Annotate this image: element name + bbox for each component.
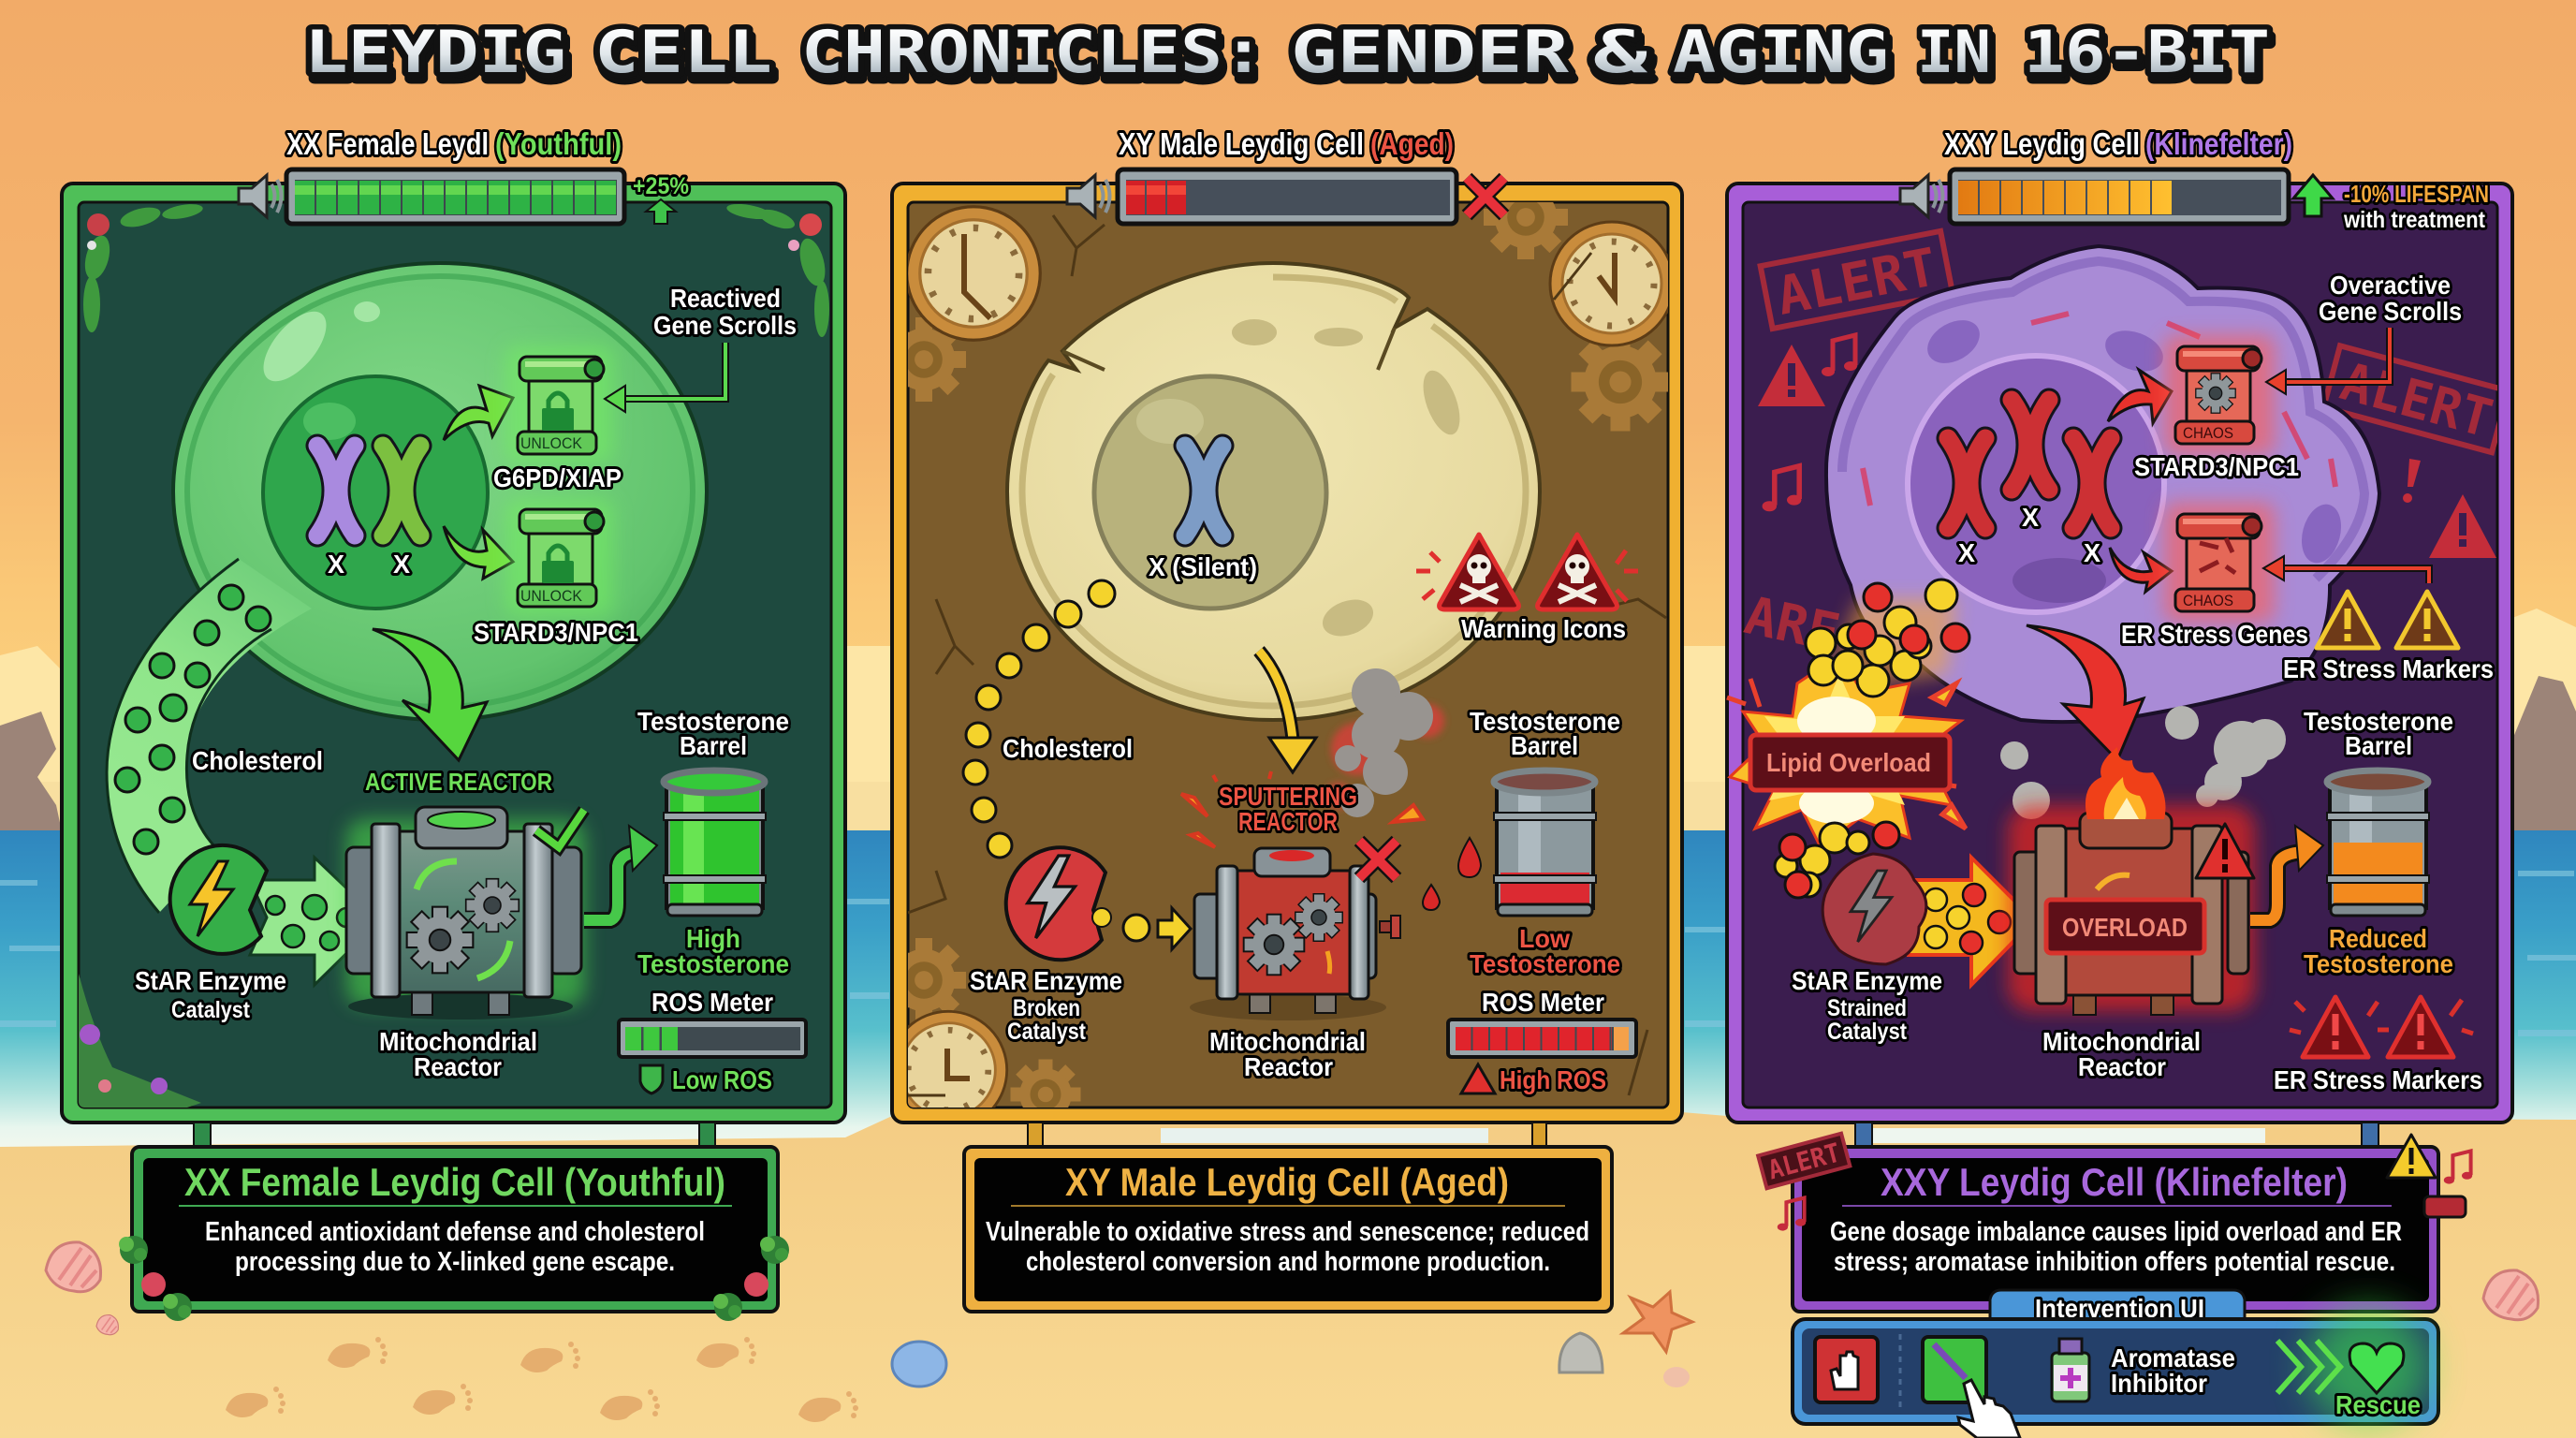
arrow: nucleus to chaos scroll bottom [2110, 548, 2172, 592]
label: aromatase inhibitor: Aromatase [2111, 1343, 2235, 1372]
blobby cell body [1826, 246, 2379, 722]
arrow: weak flow to reactor [1158, 908, 1191, 949]
caption: XX female [119, 1147, 789, 1321]
stat: lifespan with treatment: with treatment [2343, 207, 2486, 233]
icon: rescue heart [2349, 1343, 2404, 1393]
alert stamps and warnings: ALERT [2334, 351, 2498, 450]
caption: XXY Klinefelter: stress; aromatase inhibition offers potential rescue. [1834, 1247, 2395, 1277]
label: ROS meter: ROS Meter [651, 988, 773, 1017]
big red arrow into reactor [2027, 625, 2144, 760]
label: StAR enzyme: StAR Enzyme [135, 966, 286, 995]
panel: XX female youthful [62, 126, 845, 1123]
mitochondrial reactor: overloaded [2008, 747, 2255, 1015]
high ROS status: High ROS [1500, 1065, 1606, 1094]
label: panel header [1944, 126, 2292, 161]
title: LEYDIG [304, 18, 566, 86]
label: warning icons: Warning Icons [1461, 614, 1626, 643]
cholesterol droplets: sparse trail [963, 580, 1149, 941]
testosterone barrel: full [664, 770, 766, 916]
label: low testosterone [1470, 924, 1620, 978]
arrow: label to scroll [605, 343, 725, 412]
support posts: panel 3 [1855, 1123, 2378, 1149]
label: sputtering reactor: REACTOR [1238, 807, 1338, 836]
clocks, gears and cracks [882, 175, 1674, 1129]
caption: XY male: cholesterol conversion and hormone production. [1026, 1247, 1550, 1277]
button: stop hand [1815, 1337, 1878, 1402]
label: panel header: XXY Leydig Cell [1944, 126, 2140, 161]
vine decorations [79, 201, 829, 1108]
label: panel header: (Youthful) [495, 126, 622, 161]
mitochondrial reactor: damaged [1190, 841, 1400, 1020]
icons: red ER stress markers [2290, 997, 2473, 1057]
label: active reactor: ACTIVE REACTOR [365, 768, 552, 796]
caption: XY male [964, 1147, 1612, 1312]
title: GENDER [1291, 18, 1570, 86]
label: testosterone barrel: Testosterone [637, 707, 789, 736]
health bar: low red [1118, 169, 1456, 224]
label: STARD3/NPC1: STARD3/NPC1 [2134, 452, 2299, 481]
caption: XX female: XX Female Leydig Cell (Youthful) [184, 1160, 725, 1204]
label: aromatase inhibitor [2111, 1343, 2235, 1398]
label: mitochondrial reactor [1209, 1027, 1366, 1081]
stat: lifespan with treatment: -10% LIFESPAN [2344, 180, 2489, 208]
chromosome labels: X [1958, 538, 1975, 567]
arrow: cell to reactor, thin [1259, 651, 1316, 772]
label: mitochondrial reactor: Reactor [2078, 1052, 2166, 1081]
caption decorations: alert stamp and warning: ALERT [1764, 1137, 1843, 1185]
label: overactive gene scrolls [2319, 271, 2462, 326]
label: mitochondrial reactor [379, 1027, 537, 1081]
beach shells and starfish [46, 1242, 2539, 1387]
label: STARD3/NPC1: STARD3/NPC1 [474, 618, 638, 647]
icon: speaker [1900, 175, 1943, 217]
label: ER stress markers upper: ER Stress Markers [2283, 654, 2494, 683]
caption: XXY Klinefelter: Gene dosage imbalance causes lipid overload and ER [1830, 1217, 2402, 1247]
frame: gold panel [892, 183, 1682, 1123]
caption: XXY Klinefelter [1793, 1147, 2438, 1312]
title: LEYDIG [307, 24, 569, 93]
stat: lifespan with treatment [2343, 180, 2489, 233]
label: reactived gene scrolls: Gene Scrolls [653, 311, 797, 340]
title: 16-BIT [2027, 24, 2273, 93]
label: testosterone barrel: Barrel [680, 731, 747, 760]
frame: purple panel [1727, 183, 2512, 1123]
high ROS status [1461, 1064, 1606, 1094]
label: StAR enzyme broken: StAR Enzyme [970, 966, 1122, 995]
label: overload sign: OVERLOAD [2062, 913, 2188, 942]
panel: XXY Klinefelter [1727, 126, 2512, 1123]
label: testosterone barrel [637, 707, 789, 760]
testosterone drops [1423, 838, 1481, 910]
icon: speaker [1067, 175, 1110, 217]
label: StAR enzyme strained: StAR Enzyme [1792, 966, 1942, 995]
label: reduced testosterone: Testosterone [2304, 949, 2453, 978]
icon: strained StAR enzyme [1822, 854, 1926, 964]
title: CHRONICLES: [804, 24, 1267, 93]
tab: intervention UI: Intervention UI [2035, 1294, 2204, 1323]
label: mitochondrial reactor [2042, 1027, 2201, 1081]
warning icons [1416, 535, 1638, 609]
support posts: panel 1 [194, 1123, 715, 1149]
label: low testosterone: Testosterone [1470, 949, 1620, 978]
testosterone barrel: reduced [2327, 770, 2429, 916]
title: CHRONICLES: [801, 18, 1265, 86]
label: mitochondrial reactor: Mitochondrial [1209, 1027, 1366, 1056]
cracked cell body [1007, 263, 1540, 720]
icon: green up arrow [2293, 175, 2333, 216]
label: reactived gene scrolls: Reactived [670, 284, 781, 313]
icon: red x [1467, 178, 1504, 215]
smoke [1325, 668, 1444, 817]
alert stamps and warnings: ALERT [1772, 237, 1941, 328]
chromosome labels: X [2022, 503, 2039, 532]
label: lipid overload sign [1750, 735, 1950, 790]
label: ER stress markers lower: ER Stress Markers [2274, 1065, 2482, 1094]
label: sputtering reactor [1219, 782, 1357, 836]
icon: aromatase inhibitor bottle [2052, 1339, 2089, 1401]
label: rescue: Rescue [2335, 1390, 2421, 1419]
chromosome labels [328, 550, 410, 579]
label: testosterone barrel: Barrel [1511, 731, 1578, 760]
title: AGING [1673, 18, 1889, 86]
label: StAR enzyme broken: Broken [1013, 995, 1080, 1021]
gene scroll: G6PD/XIAP: UNLOCK [520, 434, 583, 452]
label: low testosterone: Low [1519, 924, 1570, 953]
cholesterol stream arc [107, 559, 312, 913]
label: testosterone barrel: Testosterone [2304, 707, 2453, 736]
gene scroll: G6PD/XIAP [505, 346, 613, 463]
label: StAR enzyme broken: Catalyst [1007, 1019, 1087, 1045]
nucleus: silent [1094, 376, 1326, 609]
label: G6PD/XIAP: G6PD/XIAP [493, 463, 622, 492]
tab: intervention UI [1990, 1290, 2245, 1323]
gene scroll: chaos bottom: CHAOS [2183, 592, 2233, 609]
label: mitochondrial reactor: Mitochondrial [2042, 1027, 2201, 1056]
label: panel header: XX Female Leydl [286, 126, 489, 161]
chromosome: purple X [317, 446, 355, 536]
label: mitochondrial reactor: Reactor [1244, 1052, 1333, 1081]
health bar: full green [286, 169, 624, 224]
arrow: label to scroll top [2266, 328, 2390, 394]
title: & [1593, 18, 1648, 86]
label: testosterone barrel: Testosterone [1470, 707, 1620, 736]
alert stamps and warnings: ARE [1739, 585, 1845, 665]
caption: XX female: processing due to X-linked gene escape. [235, 1247, 675, 1277]
alert stamps and warnings [1739, 231, 2509, 665]
lipid overload explosion [1727, 599, 1966, 847]
caption: XXY Klinefelter: XXY Leydig Cell (Klinefelter) [1881, 1160, 2348, 1204]
label: mitochondrial reactor: Reactor [414, 1052, 502, 1081]
label: panel header: (Aged) [1370, 126, 1454, 161]
title: IN [1917, 18, 1991, 86]
label: StAR enzyme strained: Catalyst [1827, 1019, 1908, 1045]
label: reactived gene scrolls [653, 284, 797, 340]
caption: XX female: Enhanced antioxidant defense and cholesterol [205, 1217, 705, 1247]
lipid droplets [1775, 580, 1969, 898]
label: StAR enzyme strained [1792, 966, 1942, 1045]
label: overactive gene scrolls: Overactive [2330, 271, 2451, 300]
label: high testosterone: High [686, 924, 740, 953]
title: AGING [1676, 24, 1892, 93]
chromosome: green X [383, 446, 420, 536]
label: reduced testosterone: Reduced [2329, 924, 2427, 953]
button: syringe [1923, 1337, 1986, 1402]
big arrow: cell to reactor [373, 629, 487, 760]
chromosome labels: X [2084, 538, 2100, 567]
smoke [2000, 706, 2286, 819]
arrow: reactor to barrel [584, 826, 657, 920]
cholesterol droplets [115, 585, 271, 854]
stat: plus 25 percent [633, 173, 689, 224]
title: 16-BIT [2024, 18, 2270, 86]
label: ROS meter: ROS Meter [1482, 988, 1604, 1017]
label: sputtering reactor: SPUTTERING [1219, 782, 1357, 811]
label: reduced testosterone [2304, 924, 2453, 978]
title: CELL [594, 18, 772, 86]
gene scroll: STARD3/NPC1 [505, 499, 613, 616]
label: StAR enzyme strained: Strained [1827, 995, 1907, 1021]
label: StAR enzyme broken [970, 966, 1122, 1045]
arrow: nucleus to chaos scroll top [2108, 370, 2172, 423]
arrow: cholesterol into reactor [250, 858, 380, 985]
caption: XY male: XY Male Leydig Cell (Aged) [1065, 1160, 1509, 1204]
label: testosterone barrel [1470, 707, 1620, 760]
testosterone barrel: low [1494, 770, 1596, 916]
label: high testosterone [637, 924, 789, 978]
title: IN [1920, 24, 1994, 93]
mitochondrial reactor: active [346, 807, 585, 1020]
label: cholesterol: Cholesterol [192, 746, 323, 775]
label: panel header: (Klinefelter) [2145, 126, 2292, 161]
label: panel header: XY Male Leydig Cell [1119, 126, 1364, 161]
icon: broken StAR enzyme [1006, 847, 1111, 960]
toolbar panel [1793, 1319, 2438, 1424]
nucleus [263, 376, 488, 609]
arrow: nucleus to scroll bottom [444, 526, 513, 579]
label: cholesterol: Cholesterol [1003, 734, 1133, 763]
icon: StAR enzyme [170, 845, 267, 954]
label: mitochondrial reactor: Mitochondrial [379, 1027, 537, 1056]
label: testosterone barrel: Barrel [2345, 731, 2412, 760]
label: testosterone barrel [2304, 707, 2453, 760]
gene scroll: chaos bottom [2164, 503, 2275, 623]
cell body [173, 263, 707, 720]
title: GENDER [1294, 24, 1573, 93]
gene scroll: STARD3/NPC1: UNLOCK [520, 587, 583, 605]
gene scroll: chaos top: CHAOS [2183, 424, 2233, 442]
label: StAR enzyme [135, 966, 286, 1023]
icons: yellow ER stress markers [2317, 592, 2458, 648]
ROS meter: low [619, 1020, 806, 1057]
support posts: panel 2 [1028, 1123, 1546, 1149]
nucleus [1908, 356, 2164, 612]
label: overload sign [2046, 900, 2204, 953]
icon: reactor warning [2196, 824, 2254, 878]
beach footprints [226, 1337, 858, 1422]
title [304, 18, 2273, 93]
title: CELL [597, 24, 775, 93]
arrow: overflowing cholesterol into reactor [1909, 858, 2034, 985]
frame: green panel [62, 183, 845, 1123]
label: high testosterone: Testosterone [637, 949, 789, 978]
panel: XY male aged [882, 126, 1682, 1129]
caption: XY male: Vulnerable to oxidative stress and senescence; reduced [986, 1217, 1589, 1247]
ROS meter: high [1448, 1020, 1636, 1057]
icon: cursor hand [1958, 1380, 2020, 1438]
arrow: nucleus to scroll top [444, 386, 513, 440]
label: X silent: X (Silent) [1149, 552, 1257, 581]
label: StAR enzyme: Catalyst [171, 997, 251, 1023]
label: overactive gene scrolls: Gene Scrolls [2319, 297, 2462, 326]
stat: plus 25 percent: +25% [633, 173, 689, 199]
caption decorations: alert stamp and warning [1758, 1134, 2472, 1231]
chromosome labels: X [328, 550, 344, 579]
sparks [1181, 771, 1423, 847]
label: aromatase inhibitor: Inhibitor [2111, 1369, 2207, 1398]
label: ER stress genes: ER Stress Genes [2121, 620, 2308, 649]
icon: speaker [239, 175, 281, 217]
arrow: markers to scroll bottom [2263, 556, 2429, 583]
gene scroll: chaos top [2164, 335, 2275, 455]
chromosome labels: X [393, 550, 410, 579]
chromosome: silent X [1185, 446, 1222, 536]
chromosomes: three red X [1948, 400, 2111, 528]
rescue glow and chevrons [2277, 1306, 2429, 1428]
title: & [1596, 24, 1651, 93]
intervention UI [1793, 1290, 2438, 1438]
arrow: reactor to barrel [2250, 826, 2323, 920]
chromosome labels [1958, 503, 2100, 567]
low ROS status [640, 1065, 772, 1094]
label: lipid overload sign: Lipid Overload [1766, 748, 1931, 777]
health bar: orange [1950, 169, 2289, 224]
low ROS status: Low ROS [672, 1065, 772, 1094]
